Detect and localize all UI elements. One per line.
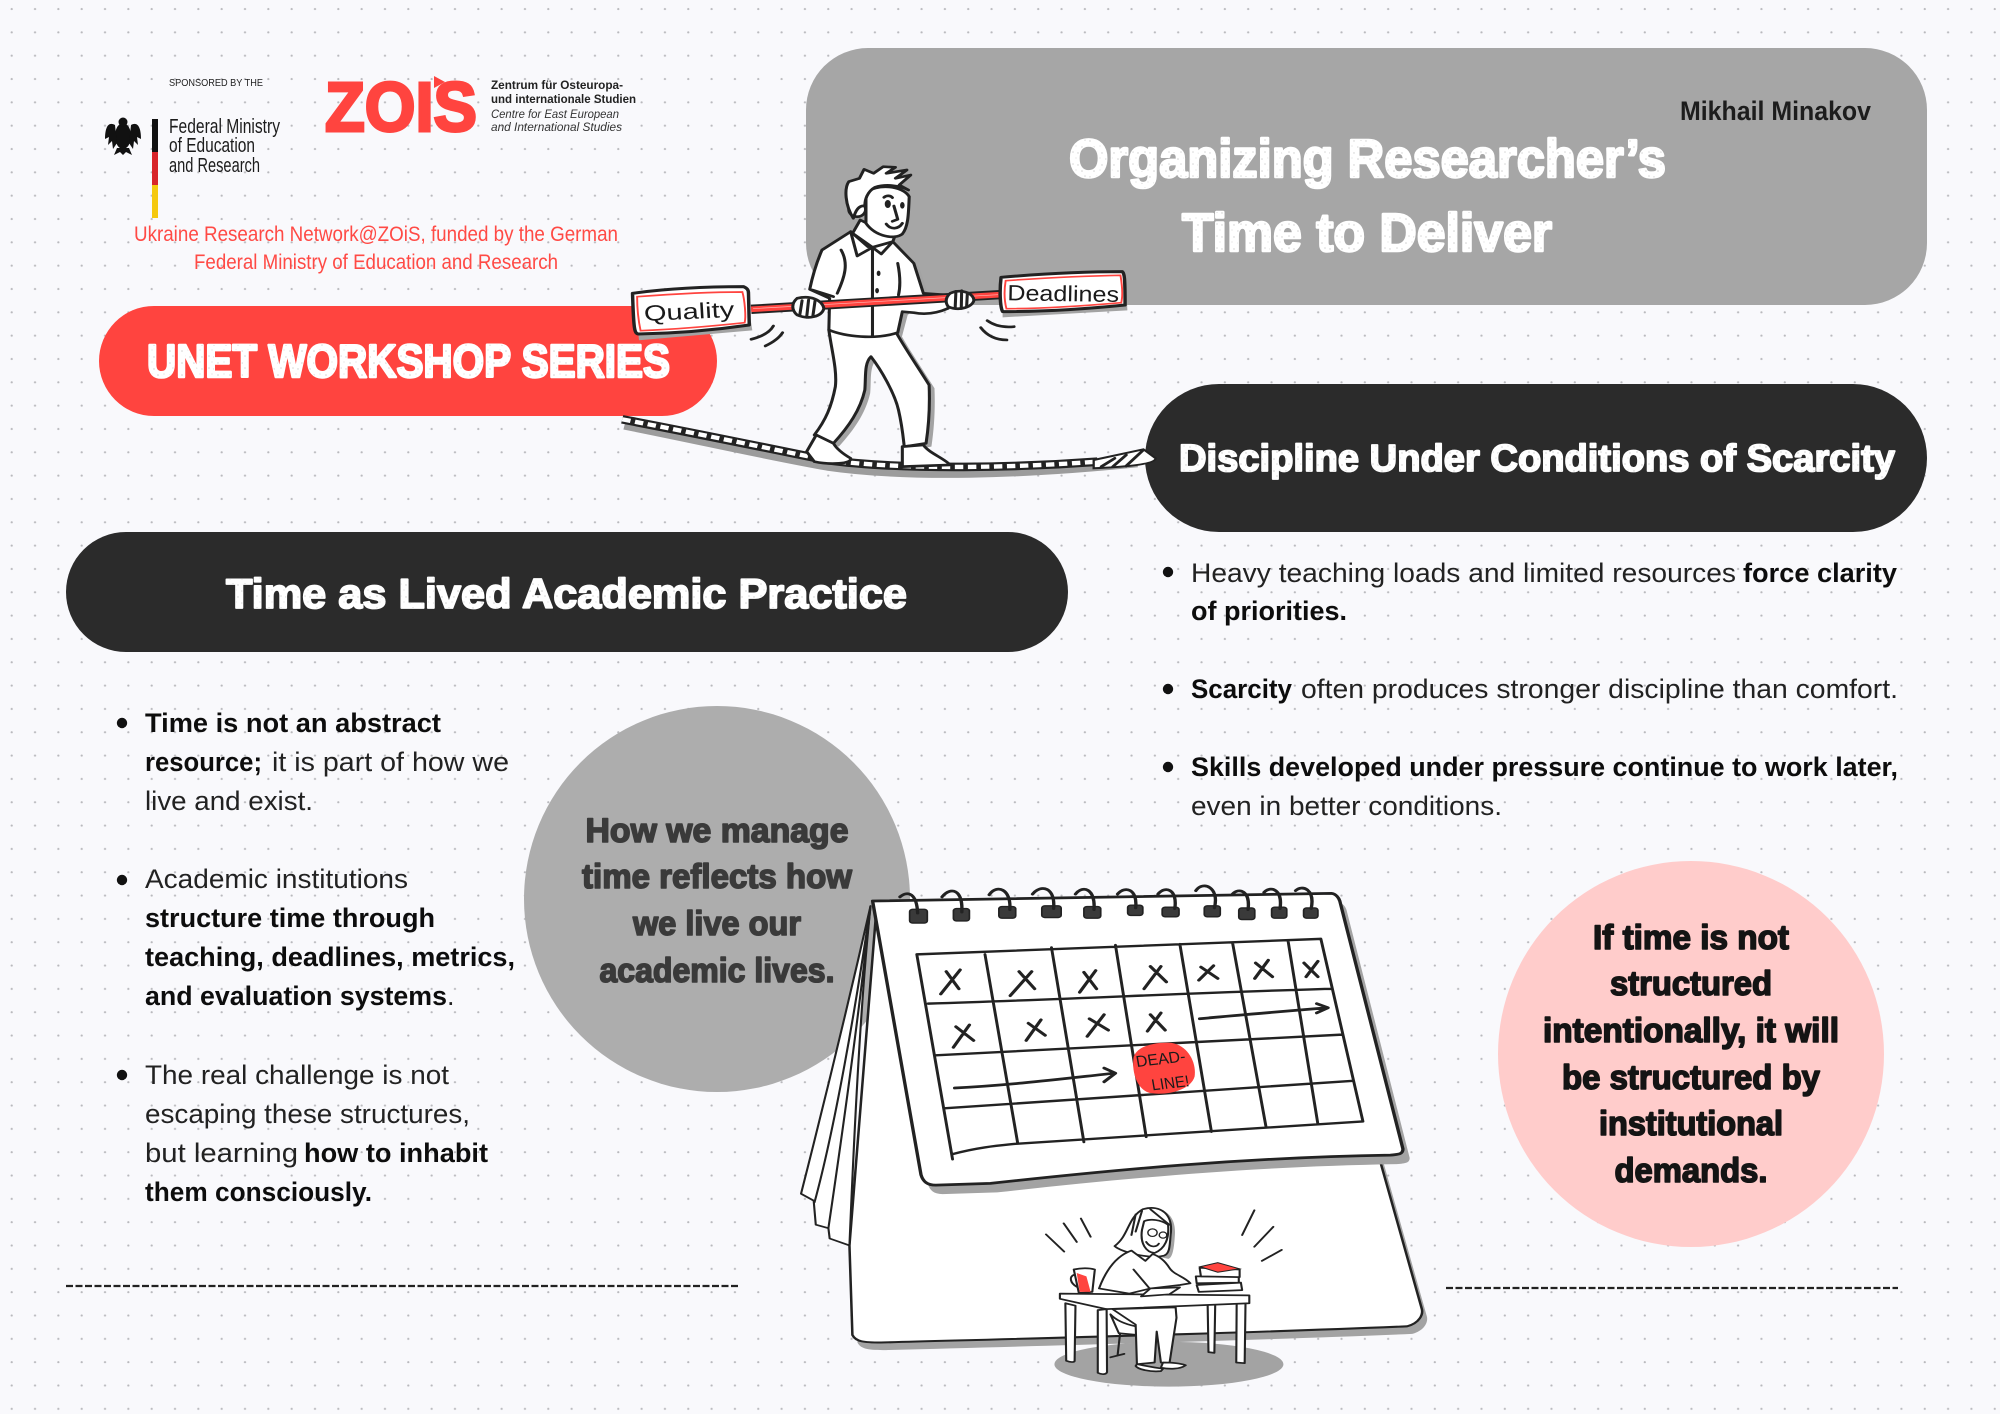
sign: Quality bbox=[633, 287, 752, 340]
logo: German federal ministry sponsor block: Federal Ministry bbox=[169, 116, 280, 138]
heading: Time as Lived Academic Practice bbox=[66, 532, 1068, 652]
heading: Discipline Under Conditions of Scarcity: Discipline Under Conditions of Scarcity bbox=[1179, 438, 1895, 480]
panel: workshop series pill: UNET WORKSHOP SERIES bbox=[147, 335, 670, 387]
text block: right bullet list bbox=[1163, 558, 1898, 821]
text block: left bullet list: structure time through bbox=[145, 903, 435, 933]
callout: grey circle: time reflects how bbox=[582, 858, 853, 896]
text block: left bullet list: it is part of how we bbox=[272, 747, 509, 777]
text block: left bullet list: resource; bbox=[145, 747, 262, 777]
text block: left bullet list: Time is not an abstract bbox=[145, 708, 441, 738]
sign: Deadlines: Deadlines bbox=[1007, 282, 1119, 308]
funding note bbox=[134, 223, 618, 274]
rope bbox=[622, 419, 1156, 474]
crossed-off days bbox=[941, 960, 1318, 1047]
callout: pink circle: demands. bbox=[1614, 1152, 1768, 1190]
text block: right bullet list: Skills developed under pressure continue to work later, bbox=[1191, 752, 1898, 782]
trousers bbox=[814, 330, 929, 447]
deadline marker bbox=[1133, 1043, 1195, 1094]
illustration: man balancing on a tightrope bbox=[622, 167, 1156, 474]
body shadow bbox=[815, 235, 935, 450]
text block: left bullet list: how to inhabit bbox=[304, 1138, 488, 1168]
logo: German federal ministry sponsor block: and Research bbox=[169, 155, 260, 177]
author name: Mikhail Minakov bbox=[1680, 96, 1871, 126]
callout: pink circle: be structured by bbox=[1562, 1059, 1820, 1097]
heading: Discipline Under Conditions of Scarcity bbox=[1145, 384, 1927, 532]
sign: Quality: Quality bbox=[643, 298, 735, 327]
logo: ZOiS: Zentrum für Osteuropa- bbox=[491, 80, 623, 92]
text block: left bullet list: The real challenge is not bbox=[145, 1060, 450, 1090]
text block: left bullet list: live and exist. bbox=[145, 786, 313, 816]
text block: left bullet list: Academic institutions bbox=[145, 864, 408, 894]
calendar grid bbox=[917, 939, 1363, 1159]
callout: pink circle: institutional bbox=[1599, 1105, 1783, 1143]
motion marks bbox=[751, 321, 1014, 346]
panel: title banner bbox=[806, 48, 1927, 305]
text block: right bullet list: of priorities. bbox=[1191, 596, 1347, 626]
logo: German federal ministry sponsor block: of Education bbox=[169, 135, 255, 157]
shirt bbox=[810, 232, 948, 337]
icon: federal eagle bbox=[105, 118, 141, 155]
head bbox=[846, 167, 911, 247]
calendar base bbox=[849, 904, 1427, 1350]
legs and chair bbox=[1110, 1307, 1186, 1371]
desk bbox=[1060, 1294, 1249, 1374]
text block: right bullet list: even in better conditions. bbox=[1191, 791, 1502, 821]
text block: right bullet list: force clarity bbox=[1743, 558, 1897, 588]
text block: left bullet list: escaping these structures, bbox=[145, 1099, 470, 1129]
logo: German federal ministry sponsor block bbox=[105, 77, 280, 218]
shoes bbox=[807, 435, 950, 467]
callout: pink circle: structured bbox=[1610, 965, 1772, 1003]
callout: grey circle: academic lives. bbox=[600, 952, 834, 990]
text block: left bullet list: and evaluation systems bbox=[145, 981, 447, 1011]
balance pole bbox=[751, 295, 1000, 309]
logo: German federal ministry sponsor block: SPONSORED BY THE bbox=[169, 77, 263, 89]
text block: left bullet list: . bbox=[447, 981, 455, 1011]
text block: left bullet list: teaching, deadlines, metrics, bbox=[145, 942, 515, 972]
panel: workshop series pill bbox=[99, 306, 717, 416]
title: Time to Deliver bbox=[1182, 203, 1552, 263]
logo: ZOiS: und internationale Studien bbox=[491, 94, 636, 106]
title bbox=[1069, 129, 1666, 263]
funding note: Ukraine Research Network@ZOiS, funded by the German bbox=[134, 223, 618, 246]
logo: ZOiS: and International Studies bbox=[491, 122, 622, 134]
text block: left bullet list bbox=[117, 708, 515, 1207]
emphasis marks bbox=[1046, 1210, 1282, 1261]
funding note: Federal Ministry of Education and Research bbox=[194, 251, 558, 274]
deadline marker: DEAD- bbox=[1134, 1047, 1187, 1071]
text block: right bullet list: Heavy teaching loads and limited resources bbox=[1191, 558, 1736, 588]
person at desk bbox=[1046, 1208, 1283, 1387]
text block: right bullet list: Scarcity bbox=[1191, 674, 1292, 704]
text block: right bullet list: often produces stronger discipline than comfort. bbox=[1301, 674, 1898, 704]
text block: left bullet list: but learning bbox=[145, 1138, 298, 1168]
sign: Deadlines bbox=[1000, 272, 1127, 317]
hands bbox=[793, 291, 974, 317]
callout: grey circle: How we manage bbox=[586, 812, 848, 850]
logo: ZOiS: ZOIS bbox=[325, 68, 477, 146]
text block: left bullet list: them consciously. bbox=[145, 1177, 372, 1207]
callout: grey circle: we live our bbox=[632, 905, 801, 943]
torso and arm bbox=[1099, 1251, 1190, 1294]
spiral rings bbox=[900, 886, 1318, 923]
stack of books bbox=[1196, 1263, 1242, 1292]
logo: ZOiS: Centre for East European bbox=[491, 109, 619, 121]
hair and head bbox=[1115, 1208, 1175, 1259]
callout: pink circle bbox=[1498, 861, 1884, 1247]
mug bbox=[1071, 1268, 1095, 1293]
deadline marker: LINE! bbox=[1150, 1072, 1191, 1094]
logo: ZOiS bbox=[325, 68, 636, 146]
illustration: desk calendar with deadline bbox=[801, 886, 1427, 1387]
stacked pages bbox=[801, 906, 870, 1245]
title: Organizing Researcher’s bbox=[1069, 129, 1666, 189]
progress arrows bbox=[955, 1004, 1328, 1088]
front page bbox=[873, 893, 1410, 1194]
callout: grey circle bbox=[524, 706, 910, 1092]
callout: pink circle: If time is not bbox=[1593, 919, 1789, 957]
callout: pink circle: intentionally, it will bbox=[1543, 1012, 1839, 1050]
notebook and pen bbox=[1134, 1270, 1180, 1296]
heading: Time as Lived Academic Practice: Time as Lived Academic Practice bbox=[226, 570, 907, 617]
